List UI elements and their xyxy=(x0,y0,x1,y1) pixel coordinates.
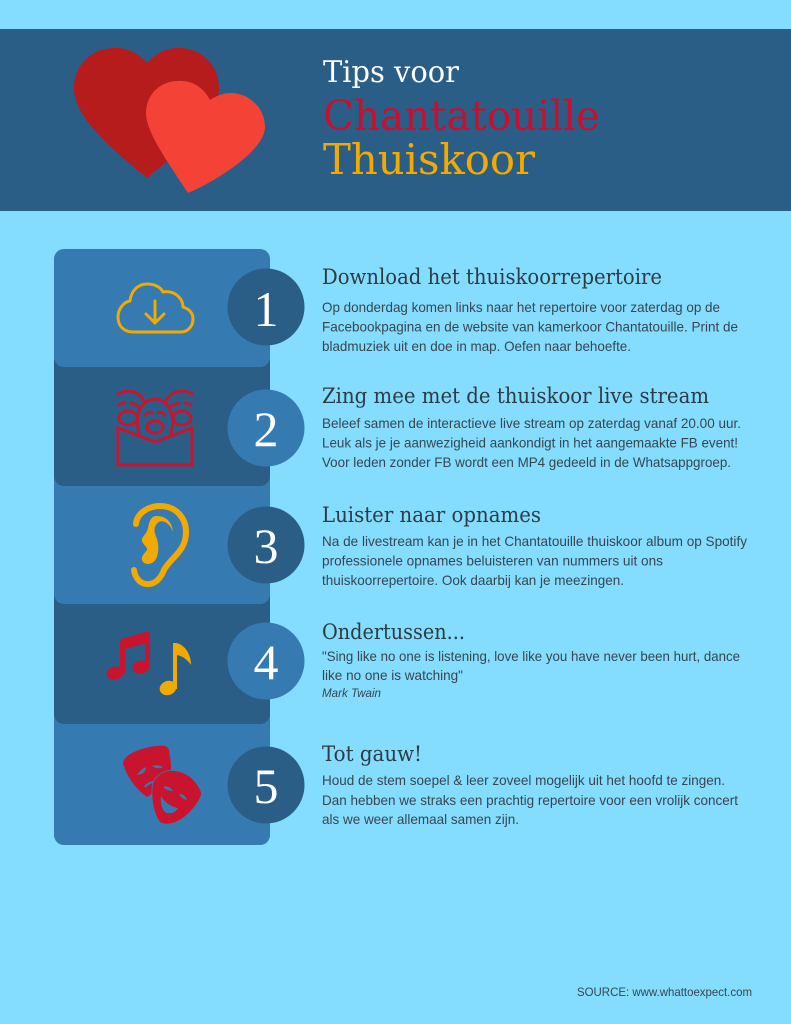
badge 1 xyxy=(228,268,304,346)
badge 3: 3 xyxy=(254,518,278,574)
icon: cloud download xyxy=(118,284,193,332)
tip 5 text: Houd de stem soepel & leer zoveel mogelijk uit het hoofd te zingen. xyxy=(322,772,725,788)
tip 2 text: Beleef samen de interactieve live stream op zaterdag vanaf 20.00 uur. xyxy=(322,415,741,431)
title xyxy=(323,55,600,184)
icon: ear xyxy=(134,506,186,584)
tip 2 text: Voor leden zonder FB wordt een MP4 gedeeld in de Whatsappgroep. xyxy=(322,454,731,470)
tip 3 text: Luister naar opnames xyxy=(322,503,541,527)
tip 5 text xyxy=(322,742,738,827)
tip 2 text: Leuk als je je aanwezigheid aankondigt in het aangemaakte FB event! xyxy=(322,434,738,450)
badge 4: 4 xyxy=(254,634,278,690)
tip 3 text: Na de livestream kan je in het Chantatouille thuiskoor album op Spotify xyxy=(322,533,747,549)
badge 4 xyxy=(228,622,304,700)
icon: theatre masks xyxy=(123,746,201,824)
badge 2: 2 xyxy=(254,401,278,457)
tip 2 text: Zing mee met de thuiskoor live stream xyxy=(322,384,709,408)
tip 5 text: Tot gauw! xyxy=(322,742,422,766)
badge 5: 5 xyxy=(254,758,278,814)
title: Thuiskoor xyxy=(323,135,536,184)
tip 5 text: als we weer allemaal samen zijn. xyxy=(322,811,519,827)
tip 4 text: Mark Twain xyxy=(322,686,381,700)
tip 4 text: Ondertussen... xyxy=(322,620,465,644)
tip 1 text: Download het thuiskoorrepertoire xyxy=(322,265,662,289)
header band xyxy=(0,29,791,211)
title: Chantatouille xyxy=(323,92,600,140)
icon: choir xyxy=(118,391,192,465)
badge 1: 1 xyxy=(254,281,278,337)
icon: music notes xyxy=(105,632,191,697)
tip 1 text xyxy=(322,265,738,354)
tip 5 text: Dan hebben we straks een prachtig repertoire voor een vrolijk concert xyxy=(322,792,738,808)
tip 3 text: thuiskoorrepertoire. Ook daarbij kan je meezingen. xyxy=(322,572,624,588)
tip 2 text xyxy=(322,384,741,470)
tip 4 text: like no one is watching" xyxy=(322,667,463,683)
badge 3 xyxy=(228,506,304,584)
icon: hearts xyxy=(74,48,265,193)
tip 1 text: Facebookpagina en de website van kamerkoor Chantatouille. Print de xyxy=(322,318,738,334)
title: Tips voor xyxy=(323,55,460,90)
tip 4 text xyxy=(322,620,740,700)
tip 1 text: bladmuziek uit en doe in map. Oefen naar behoefte. xyxy=(322,338,631,354)
tip 3 text: professionele opnames beluisteren van nummers uit ons xyxy=(322,552,663,568)
badge 5 xyxy=(228,746,304,824)
source note: SOURCE: www.whattoexpect.com xyxy=(577,985,752,999)
panel stack xyxy=(54,249,270,845)
tip 1 text: Op donderdag komen links naar het repertoire voor zaterdag op de xyxy=(322,299,720,315)
badge 2 xyxy=(228,390,304,466)
tip 3 text xyxy=(322,503,747,588)
tip 4 text: "Sing like no one is listening, love like you have never been hurt, dance xyxy=(322,648,740,664)
